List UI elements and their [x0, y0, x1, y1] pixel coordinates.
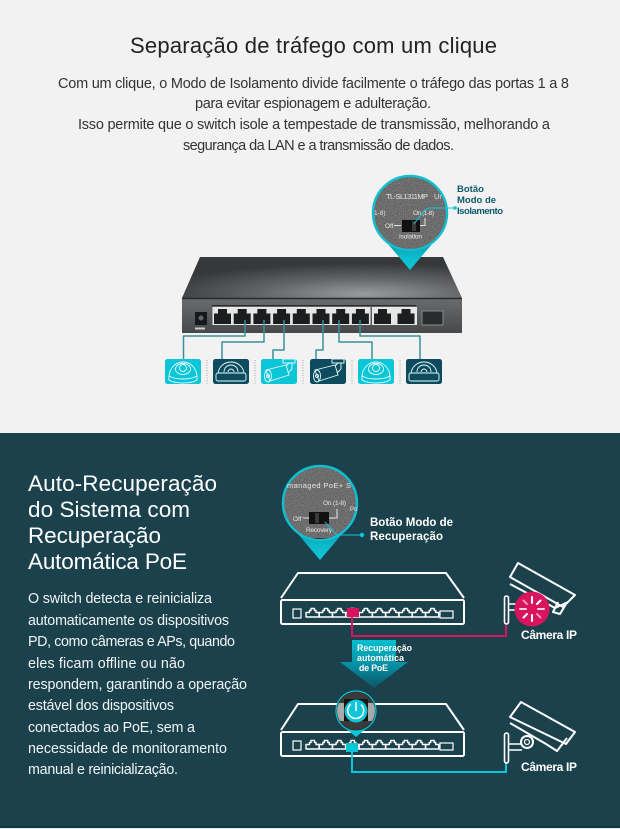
callout: recovery button label — [370, 517, 453, 543]
text block: recovery description: automaticamente os dispositivos — [28, 613, 229, 629]
magnifier: recovery switch: managed PoE+ S — [287, 481, 351, 490]
text block: isolation description: Com um clique, o Modo de Isolamento divide facilmente o tráfego das portas 1 a 8 — [58, 76, 569, 92]
switch outline: fault state — [281, 573, 464, 624]
magnifier: isolation switch: Ur — [434, 192, 442, 201]
magnifier: recovery switch: Recovery — [306, 527, 333, 534]
text block: recovery description: respondem, garantindo a operação — [28, 677, 247, 693]
magnifier: recovery switch — [282, 465, 364, 560]
magnifier: power restart icon — [336, 691, 376, 737]
magnifier: isolation switch: TL-SL1311MP — [386, 192, 428, 201]
text block: recovery description — [28, 591, 247, 778]
arrow: PoE auto recovery: de PoE — [359, 663, 388, 673]
text block: isolation description: para evitar espionagem e adulteração. — [195, 96, 431, 112]
heading: auto recovery: Recuperação — [28, 523, 161, 548]
icon: camera tile 6 — [406, 359, 442, 384]
heading: auto recovery: Auto-Recuperação — [28, 471, 217, 496]
label: IP camera top: Câmera IP — [521, 628, 577, 642]
magnifier: isolation switch: 1-8) — [374, 210, 386, 217]
icon: camera tile 3 — [261, 359, 297, 384]
magnifier: isolation switch — [372, 175, 457, 270]
heading: auto recovery — [28, 471, 217, 574]
magnifier: isolation switch: On (1-8) — [413, 210, 434, 217]
text block: recovery description: necessidade de monitoramento — [28, 741, 227, 757]
icon: camera tile 1 — [165, 359, 201, 384]
text block: recovery description: eles ficam offline ou não — [28, 656, 185, 672]
arrow: PoE auto recovery: automática — [357, 653, 404, 663]
panel: traffic separation — [58, 36, 568, 384]
magnifier: isolation switch: Off — [385, 223, 394, 230]
magnifier: recovery switch: Off — [293, 516, 302, 523]
callout: recovery button label: Recuperação — [370, 531, 443, 543]
text block: recovery description: manual e reinicialização. — [28, 762, 178, 778]
icon: camera fault — [504, 563, 575, 626]
arrow: PoE auto recovery: Recuperação — [357, 643, 413, 653]
text block: recovery description: conectados ao PoE, sem a — [28, 720, 195, 736]
switch outline: recovered state — [281, 704, 464, 756]
callout: isolation button label: Modo de — [457, 195, 496, 206]
dotted separators — [207, 360, 400, 384]
panel: auto recovery — [0, 433, 620, 829]
arrow: PoE auto recovery — [340, 640, 413, 688]
switch photo — [182, 257, 462, 333]
link: fault line — [352, 617, 506, 636]
heading: auto recovery: Automática PoE — [28, 549, 187, 574]
callout: recovery button label: Botão Modo de — [370, 517, 453, 529]
connection lines — [184, 320, 420, 359]
text block: recovery description: PD, como câmeras e APs, quando — [28, 634, 235, 650]
text block: isolation description: Isso permite que o switch isole a tempestade de transmissão, melhorando a — [78, 117, 551, 133]
heading: traffic separation: Separação de tráfego com um clique — [130, 33, 497, 58]
callout: isolation button label — [457, 184, 503, 217]
magnifier: isolation switch: Isolation — [399, 234, 422, 240]
text block: recovery description: O switch detecta e reinicializa — [28, 591, 212, 607]
callout: isolation button label: Botão — [457, 184, 484, 195]
label: IP camera bottom: Câmera IP — [521, 760, 577, 774]
text block: recovery description: estável dos dispositivos — [28, 698, 174, 714]
text block: isolation description: segurança da LAN e a transmissão de dados. — [183, 138, 454, 154]
magnifier: recovery switch: On (1-8) — [323, 500, 346, 507]
link: restored line — [352, 752, 506, 772]
magnifier: recovery switch: Po — [350, 507, 358, 513]
icon: camera tile 4 — [310, 359, 346, 384]
icon: camera restored — [504, 702, 575, 763]
callout: isolation button label: Isolamento — [457, 206, 503, 217]
icon: camera tile 2 — [213, 359, 249, 384]
icon: camera tile 5 — [358, 359, 394, 384]
heading: auto recovery: do Sistema com — [28, 497, 190, 522]
text block: isolation description — [58, 76, 569, 154]
